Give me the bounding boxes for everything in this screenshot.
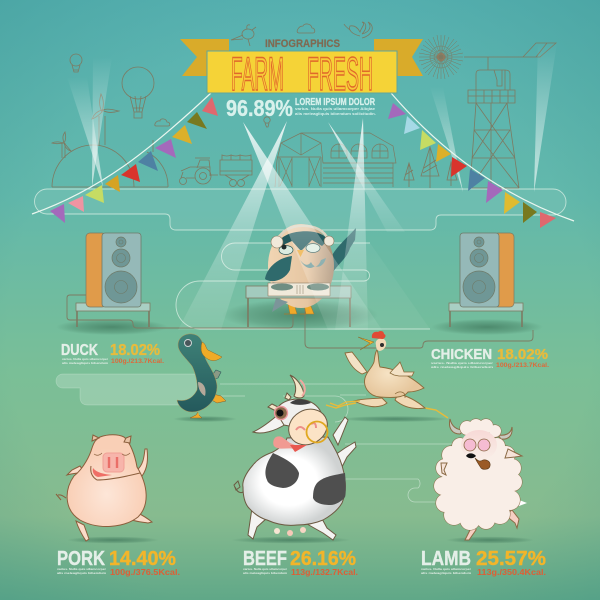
stat: chicken: CHICKEN <box>431 346 492 363</box>
stat: pork: 14.40% <box>109 548 176 570</box>
stat: lamb: LAMB <box>421 548 471 570</box>
headline stat: varius. Nulla quis ullamcorper Aliqiae <box>295 106 376 111</box>
spotlight beams <box>67 43 557 330</box>
subtitle: infographics: INFOGRAPHICS <box>265 38 340 50</box>
owl raised wing <box>328 228 356 272</box>
speaker left on table <box>76 233 150 327</box>
stat: chicken: 100g./213.7Kcal. <box>496 362 549 369</box>
stat: beef: varius. Nulla quis ullamcorper <box>243 567 288 571</box>
headline stat: alis meleagliquis bibendum sollicitudin. <box>295 111 376 116</box>
stat: duck: DUCK <box>61 342 98 359</box>
icon: pine trees <box>404 147 457 188</box>
stat: beef: alis meleagliquis bibendum <box>243 571 287 575</box>
motion lines <box>218 384 470 502</box>
icon: bird left of subtitle <box>231 25 256 46</box>
icon: small hot air balloon <box>70 54 82 72</box>
icon: cloud top <box>297 24 315 33</box>
owl feet <box>284 304 314 314</box>
owl eyes and beak <box>279 246 293 254</box>
bunting left <box>32 93 218 223</box>
stat: duck <box>61 342 164 365</box>
owl chest pattern <box>300 258 326 268</box>
icon: light bulb balloon <box>264 117 270 127</box>
stat: lamb: 113g./350.4Kcal. <box>477 568 546 577</box>
speaker right on table <box>449 233 523 327</box>
stat: chicken: varius. Nulla quis ullamcorper <box>431 361 494 365</box>
headline stat: LOREM IPSUM DOLOR <box>295 97 376 108</box>
stat: beef: BEEF <box>243 548 287 570</box>
stat: duck: alis meleagliquis bibendum <box>62 361 108 365</box>
stat: pork: varius. Nulla quis ullamcorper <box>57 567 107 571</box>
icon: cloud left <box>155 119 170 126</box>
icon: butterfly bird right of subtitle <box>344 22 372 38</box>
stat: duck: 100g./213.7Kcal. <box>111 358 164 365</box>
ground shadows <box>56 299 543 544</box>
stat: chicken: alis meleagliquis bibendum <box>431 365 494 369</box>
sheep wool fill <box>434 419 522 530</box>
owl body <box>268 224 334 308</box>
title banner: FRESH <box>307 47 373 100</box>
stat: lamb: 25.57% <box>476 548 546 570</box>
sheep <box>434 419 527 540</box>
sheep wool outline <box>434 419 522 530</box>
DJ owl at turntable <box>246 224 356 327</box>
cow <box>234 375 360 540</box>
icon: sunflower windmill <box>419 35 463 79</box>
headline stat <box>226 95 376 121</box>
stat: beef <box>243 548 358 577</box>
DJ table and decks <box>246 286 351 298</box>
wavy pill clouds <box>35 189 566 329</box>
owl left wing <box>265 256 292 281</box>
icon: large hot air balloon <box>122 67 154 118</box>
stat: lamb <box>421 548 546 577</box>
stat: beef: 113g./132.7Kcal. <box>291 568 358 577</box>
stat: pork <box>57 548 180 577</box>
headphones <box>279 226 328 240</box>
stat: chicken <box>431 346 549 369</box>
duck <box>177 334 226 418</box>
stat: pork: 100g./376.5Kcal. <box>110 568 180 577</box>
stat: lamb: alis meleagliquis bibendum <box>421 571 471 575</box>
audio cables <box>67 287 533 348</box>
title ribbon <box>180 39 423 76</box>
icon: barn <box>275 133 396 187</box>
stat: lamb: varius. Nulla quis ullamcorper <box>421 567 472 571</box>
stat: duck: varius. Nulla quis ullamcorper <box>62 357 109 361</box>
bunting right <box>388 93 574 228</box>
headline stat: 96.89% <box>226 95 293 121</box>
icon: tractor and trailer <box>180 155 252 186</box>
title banner <box>207 47 397 100</box>
title: farm fresh: FARM <box>231 47 284 100</box>
stat: duck: 18.02% <box>110 342 160 359</box>
line art: left landscape with hills and wind turbines <box>52 94 168 187</box>
owl head cap <box>279 231 328 251</box>
stat: chicken: 18.02% <box>497 346 548 363</box>
icon: water tower <box>464 43 556 188</box>
stat: beef: 26.16% <box>290 548 356 570</box>
stat: pork: PORK <box>57 548 105 570</box>
stat: pork: alis meleagliquis bibendum <box>57 571 106 575</box>
chicken <box>326 331 448 418</box>
cloud band behind duck <box>56 374 197 405</box>
pig <box>56 435 152 541</box>
